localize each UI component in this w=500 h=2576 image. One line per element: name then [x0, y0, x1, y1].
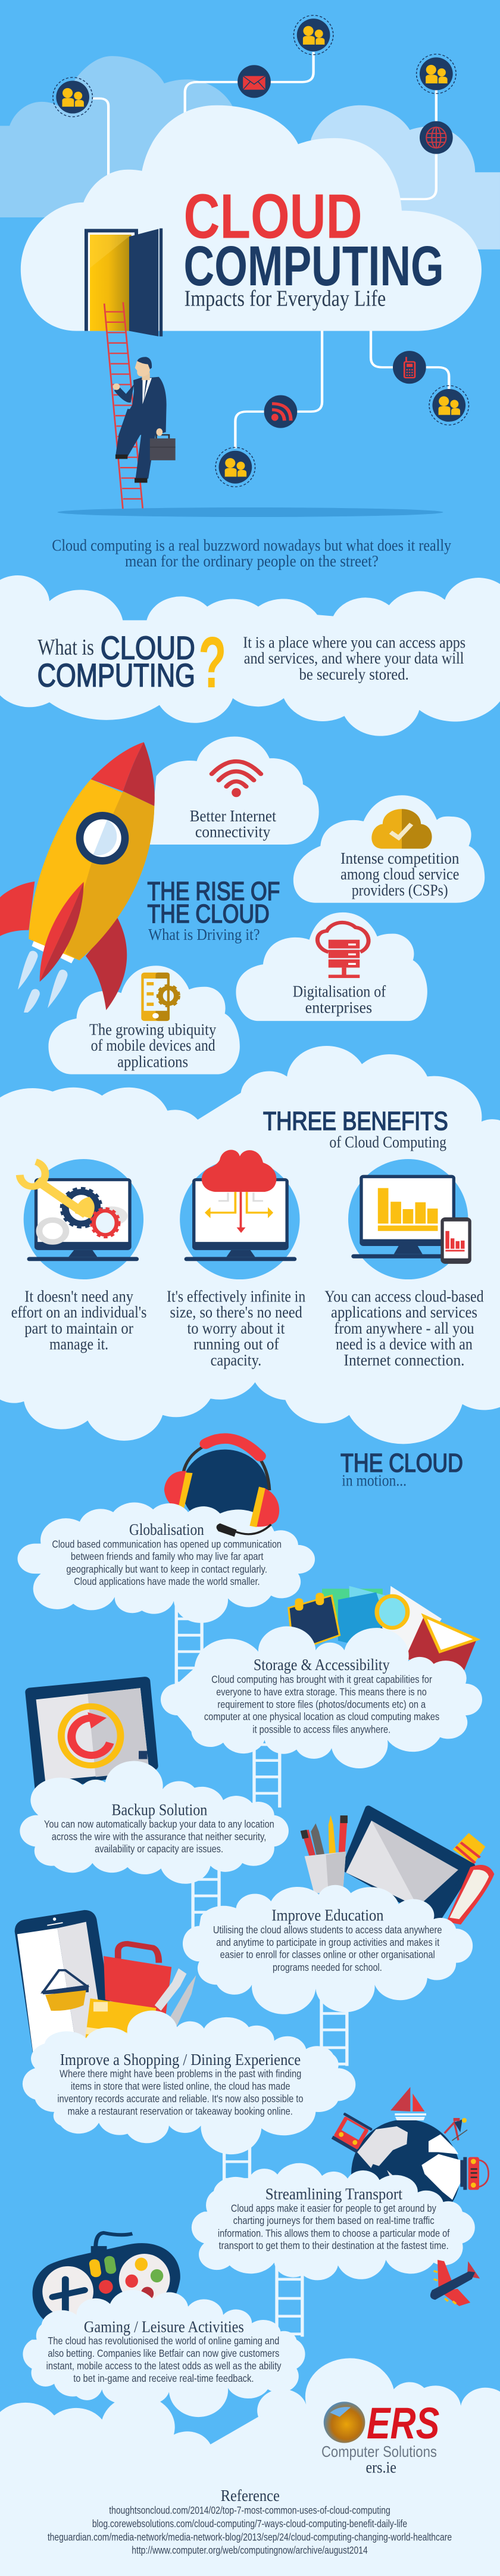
text: gaming — [46, 2335, 282, 2385]
label: intense competition: among cloud service — [340, 865, 459, 883]
intro text: mean for the ordinary people on the street? — [125, 552, 379, 570]
website: ers.ie — [365, 2459, 396, 2477]
heading: cloud computing: COMPUTING — [38, 657, 195, 694]
reference list — [48, 2505, 452, 2556]
footer cloud — [0, 2358, 500, 2576]
section: gaming — [23, 2233, 305, 2417]
intro text — [52, 536, 451, 570]
text: globalisation — [52, 1539, 282, 1588]
cloud: transport — [192, 2163, 475, 2280]
title: CLOUD COMPUTING: CLOUD — [184, 182, 362, 251]
heading: the rise of the cloud: THE RISE OF — [147, 877, 280, 905]
text: storage — [204, 1674, 439, 1736]
heading: the rise of the cloud — [147, 877, 280, 928]
label: digitalisation: Digitalisation of — [293, 982, 386, 1001]
definition text — [243, 633, 465, 684]
cloud: digitalisation — [236, 912, 427, 1021]
benefit descriptions — [11, 1287, 484, 1369]
section: globalisation — [17, 1438, 315, 1623]
cloud: education — [183, 1885, 473, 2014]
icon: headset right cup and mic — [217, 1487, 279, 1537]
panel: what is cloud computing — [0, 575, 500, 736]
benefit 2 text — [167, 1287, 305, 1369]
reference list: http://www.computer.org/web/computingnow/archive/august2014 — [132, 2545, 368, 2556]
heading: storage: Storage & Accessibility — [254, 1656, 390, 1674]
benefit 1 text: part to maintain or — [24, 1319, 133, 1337]
panel: three benefits — [0, 1046, 500, 1444]
rocket nozzle — [32, 940, 74, 963]
label: mobile devices: of mobile devices and — [91, 1036, 215, 1055]
text: backup: You can now automatically backup your data to any location — [44, 1819, 274, 1830]
subheading: of Cloud Computing — [329, 1133, 446, 1151]
benefit 1 text: effort on an individual's — [11, 1303, 146, 1321]
body: transport — [218, 2203, 450, 2252]
icon: cloud server — [317, 923, 368, 978]
heading: backup: Backup Solution — [111, 1801, 207, 1819]
text: shopping: make a restaurant reservation or takeaway booking online. — [68, 2106, 293, 2117]
rocket body — [29, 742, 155, 960]
icon: airplane — [430, 2260, 480, 2306]
label: better internet: Better Internet — [190, 807, 276, 825]
icon: wifi — [212, 761, 261, 795]
businessman — [113, 357, 176, 482]
company name: Computer Solutions — [321, 2443, 437, 2460]
cloud: gaming — [23, 2290, 305, 2417]
label: intense competition: Intense competition — [340, 849, 459, 868]
heading: cloud computing — [38, 630, 195, 694]
label: digitalisation: enterprises — [305, 998, 372, 1017]
text: gaming: instant, mobile access to the latest odds as well as the ability — [46, 2360, 282, 2372]
benefit 1 icon: monitor with wrench — [20, 1159, 143, 1279]
text: education — [213, 1924, 442, 1973]
rocket exhaust — [18, 951, 68, 1013]
network node: people right — [417, 54, 456, 94]
question mark: ? — [198, 622, 226, 703]
panel: rise of the cloud — [150, 737, 485, 903]
icon: tablet with backup arrow — [30, 1681, 153, 1788]
text: globalisation: between friends and family who may live far apart — [71, 1551, 264, 1563]
rocket centre fin — [40, 882, 84, 982]
text: education: programs needed for school. — [273, 1962, 382, 1973]
text: shopping: items in store that were listed online, the cloud has made — [71, 2081, 290, 2092]
network node: people bottom — [215, 447, 255, 487]
rocket window — [76, 812, 129, 865]
benefit 3 text — [324, 1287, 484, 1369]
text: globalisation: geographically but want to keep in contact regularly. — [66, 1564, 267, 1575]
benefit 1 text: manage it. — [49, 1335, 108, 1353]
network node: globe — [420, 121, 453, 154]
benefits cloud — [0, 1046, 500, 1444]
benefit 1 text — [11, 1287, 146, 1353]
section: shopping and dining — [15, 1910, 355, 2154]
definition text: be securely stored. — [299, 665, 409, 684]
benefit 2 icon: monitor with red cloud — [180, 1150, 300, 1279]
cloud: intense competition — [293, 795, 485, 903]
heading: the rise of the cloud: THE CLOUD — [147, 899, 270, 928]
subheading: What is Driving it? — [148, 926, 260, 943]
main cloud — [21, 105, 482, 331]
label: mobile devices: applications — [117, 1052, 188, 1071]
benefit 3 icon: monitor with bar chart and phone — [348, 1159, 471, 1279]
cloud: backup — [20, 1761, 289, 1884]
logo: ERS globe — [324, 2401, 365, 2443]
rocket fins — [0, 881, 127, 1010]
benefit 2 text: to worry about it — [187, 1319, 285, 1337]
heading: globalisation: Globalisation — [129, 1521, 204, 1538]
text: shopping: inventory records accurate and reliable. It's now also possible to — [57, 2094, 303, 2105]
label: mobile devices — [89, 1021, 216, 1071]
door — [85, 228, 162, 337]
cloud: better internet — [150, 737, 319, 845]
subtitle: Impacts for Everyday Life — [185, 286, 386, 312]
panel: the cloud in motion — [15, 1438, 494, 2417]
icon: globe with vehicles — [330, 2087, 489, 2229]
text: transport — [218, 2185, 480, 2306]
icon: tablet, pencils and book — [301, 1808, 494, 1924]
benefit 2 text: It's effectively infinite in — [167, 1287, 305, 1306]
benefit 3 text: Internet connection. — [343, 1351, 465, 1369]
label: mobile devices: The growing ubiquity — [89, 1021, 216, 1039]
back cloud left — [0, 56, 233, 217]
section: backup solution — [20, 1681, 289, 1884]
text: storage: it possible to access files anywhere. — [252, 1724, 390, 1736]
benefit 1 text: It doesn't need any — [24, 1287, 133, 1306]
icon: globe with headset — [164, 1438, 270, 1527]
label: intense competition — [340, 849, 459, 899]
section: improve education — [183, 1808, 494, 2014]
label: digitalisation — [293, 982, 386, 1017]
heading: gaming: Gaming / Leisure Activities — [84, 2318, 244, 2336]
heading: reference: Reference — [221, 2487, 280, 2505]
heading: what is: What is — [38, 635, 94, 660]
cloud band — [0, 575, 500, 736]
network node: phone — [393, 351, 426, 384]
icon: phone with gear — [141, 973, 179, 1021]
panel: footer — [0, 2358, 500, 2576]
network node: people top — [293, 15, 333, 55]
label: better internet: connectivity — [195, 823, 270, 841]
section: streamlining transport — [192, 2087, 489, 2306]
subheading: in motion: in motion... — [342, 1471, 407, 1490]
ladders — [176, 1598, 347, 2337]
text: gaming: The cloud has revolutionised the world of online gaming and — [48, 2335, 279, 2347]
text: gaming: to bet in-game and receive real-time feedback. — [73, 2373, 254, 2385]
title: CLOUD COMPUTING — [184, 182, 444, 297]
text: shopping: Where there might have been problems in the past with finding — [60, 2069, 301, 2080]
icon: gold cloud check — [371, 809, 432, 849]
network node: people lower right — [429, 385, 468, 425]
connector lines — [92, 52, 449, 448]
text: gaming: also betting. Companies like Betfair can now give customers — [48, 2348, 279, 2360]
heading: transport: Streamlining Transport — [265, 2185, 403, 2203]
heading: cloud computing: CLOUD — [101, 630, 195, 666]
text: backup: availability or capacity are issues. — [95, 1843, 223, 1855]
network node: envelope — [238, 65, 271, 98]
ground shadow — [57, 507, 443, 517]
ladder to door — [104, 302, 143, 512]
icon: game controller — [33, 2233, 180, 2320]
benefit 2 text: running out of — [193, 1335, 279, 1353]
label: better internet — [190, 807, 276, 841]
text: shopping — [57, 2069, 303, 2117]
heading: education: Improve Education — [271, 1906, 383, 1924]
text: storage: requirement to store files (photos/documents etc) on a — [217, 1699, 426, 1711]
logo: ERS: ERS — [367, 2399, 439, 2448]
network node: people left — [53, 77, 92, 117]
section: storage and accessibility — [161, 1586, 482, 1768]
text: globalisation: Cloud based communication has opened up communication — [52, 1539, 282, 1550]
text: backup — [44, 1819, 274, 1855]
cloud: shopping — [23, 2011, 355, 2154]
benefit 2 text: size, so there's no need — [170, 1303, 302, 1321]
heading: shopping: Improve a Shopping / Dining Experience — [60, 2051, 301, 2069]
icon: phone, basket, bag and cutlery — [15, 1910, 196, 2068]
icon: folders, calendar, magnifier, envelope — [289, 1586, 477, 1675]
cloud: storage — [161, 1627, 482, 1768]
panel: hero — [0, 15, 500, 512]
cloud: globalisation — [17, 1503, 315, 1623]
network node: rss — [264, 395, 297, 428]
panel: rise heading and lower clouds — [48, 877, 427, 1074]
label: intense competition: providers (CSPs) — [352, 881, 448, 899]
illustration: rocket — [0, 742, 155, 1013]
benefit 2 text: capacity. — [211, 1351, 261, 1369]
back cloud right — [311, 105, 500, 250]
text: globalisation: Cloud applications have made the world smaller. — [74, 1576, 260, 1588]
cloud: mobile devices — [48, 965, 240, 1074]
text: backup: across the wire with the assurance that neither security, — [52, 1831, 266, 1843]
